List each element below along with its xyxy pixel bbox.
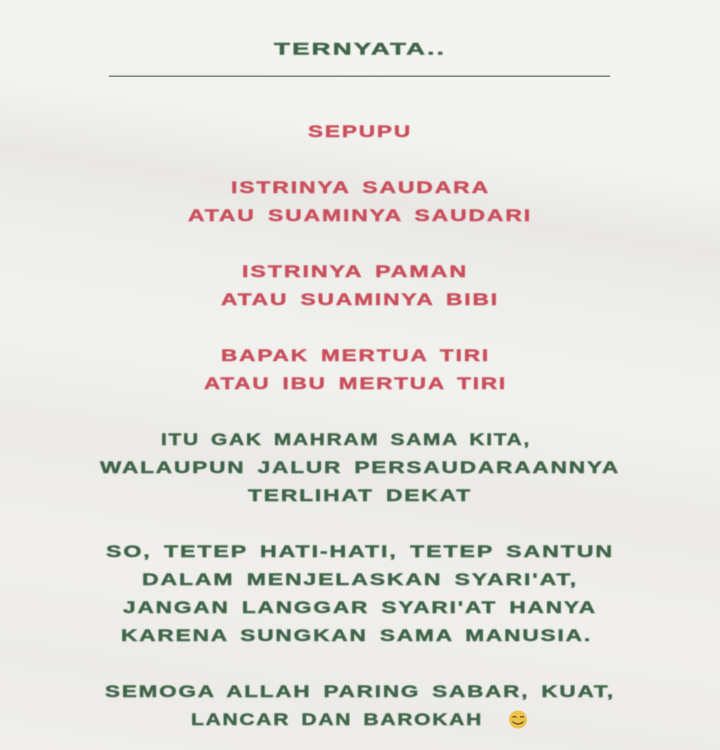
text block: red list of relatives: ATAU SUAMINYA SAUDARI [188,206,532,225]
text block: not mahram statement: ITU GAK MAHRAM SAMA KITA, [161,430,531,449]
text block: red list of relatives [188,122,532,393]
text block: red list of relatives: ATAU IBU MERTUA TIRI [204,374,507,393]
text block: red list of relatives: ISTRINYA SAUDARA [231,178,490,197]
text block: advice: JANGAN LANGGAR SYARI'AT HANYA [123,598,597,617]
divider line [109,76,610,77]
text block: red list of relatives: ISTRINYA PAMAN [242,262,468,281]
text block: advice: DALAM MENJELASKAN SYARI'AT, [142,570,578,589]
text block: closing prayer: LANCAR DAN BAROKAH [191,710,483,729]
text block: advice: SO, TETEP HATI-HATI, TETEP SANTUN [106,542,614,561]
text block: red list of relatives: BAPAK MERTUA TIRI [221,346,490,365]
text block: closing prayer: SEMOGA ALLAH PARING SABAR, KUAT, [105,682,615,701]
text block: closing prayer [105,682,615,729]
text block: advice [106,542,614,645]
text block: advice: KARENA SUNGKAN SAMA MANUSIA. [121,626,592,645]
text block: red list of relatives: ATAU SUAMINYA BIBI [221,290,499,309]
text block: not mahram statement [100,430,620,505]
text block: red list of relatives: SEPUPU [308,122,412,141]
title: TERNYATA.. [274,40,446,58]
text block: not mahram statement: TERLIHAT DEKAT [248,486,472,505]
text block: not mahram statement: WALAUPUN JALUR PERSAUDARAANNYA [100,458,620,477]
icon: smiling emoji [509,710,527,728]
